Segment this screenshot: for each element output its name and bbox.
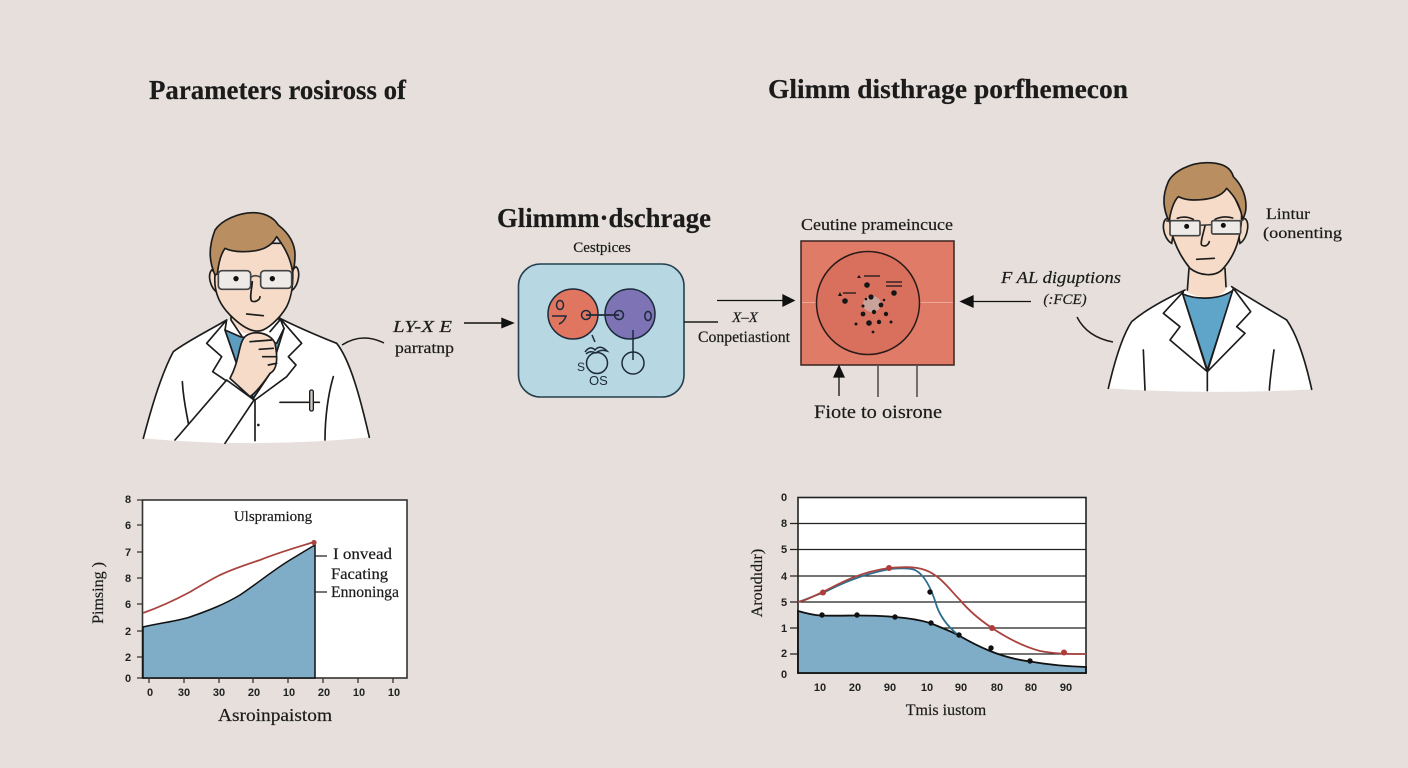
x axis labels: 20 xyxy=(318,687,330,699)
y axis labels: 8 xyxy=(781,518,787,530)
y axis labels xyxy=(125,494,131,685)
y axis labels: 6 xyxy=(125,520,131,532)
x axis labels: 80 xyxy=(991,682,1003,694)
blue line series xyxy=(798,568,958,635)
illustration: scientist thinking xyxy=(143,213,369,443)
text: red panel caption: Ceutine prameincuce xyxy=(801,215,953,234)
text: right scientist label: Lintur xyxy=(1266,206,1311,223)
y axis labels: 6 xyxy=(125,599,131,611)
y axis labels: 1 xyxy=(781,623,787,635)
area series xyxy=(143,545,315,678)
text: left scientist label xyxy=(392,317,454,357)
y axis labels: 5 xyxy=(781,544,787,556)
arrow: label to blue diagram xyxy=(464,318,513,328)
text: competition label: X–X xyxy=(731,310,759,326)
data points red xyxy=(820,565,1067,656)
chart title: Ulspramiong xyxy=(234,509,313,525)
area series xyxy=(798,611,1086,673)
connector: blue box leader xyxy=(684,321,718,323)
y axis labels: 0 xyxy=(781,669,787,681)
chart: right line chart xyxy=(749,492,1086,719)
particles xyxy=(838,275,902,333)
x axis labels: 20 xyxy=(248,687,260,699)
title: right heading: Glimm disthrage porfhemecon xyxy=(768,74,1128,104)
y axis labels: 8 xyxy=(125,494,131,506)
connector between circles xyxy=(552,300,651,360)
text: right callout: (:FCE) xyxy=(1043,292,1087,308)
x axis labels: 30 xyxy=(213,687,225,699)
axis titles: Tmis iustom xyxy=(906,702,987,719)
text: competition label: Conpetiastiont xyxy=(698,329,791,346)
y axis labels: 0 xyxy=(125,673,131,685)
x axis labels: 90 xyxy=(884,682,896,694)
y axis labels: 0 xyxy=(781,492,787,504)
text: red panel footer: Fiote to oisrone xyxy=(814,402,942,423)
x axis labels: 90 xyxy=(1060,682,1072,694)
text: right scientist label: (oonenting xyxy=(1263,225,1342,242)
y axis labels: 8 xyxy=(125,573,131,585)
text: diagram subtitle: Cestpices xyxy=(573,240,631,256)
y axis labels: 4 xyxy=(781,571,788,583)
icon: small circles xyxy=(586,352,644,374)
arrow: right label to red panel xyxy=(961,296,1031,307)
text: right callout: F AL diguptions xyxy=(1000,268,1121,287)
series labels xyxy=(315,546,399,601)
x axis labels: 20 xyxy=(849,682,861,694)
y axis labels: 5 xyxy=(781,597,787,609)
text: competition label xyxy=(698,310,791,346)
text: right scientist label xyxy=(1263,206,1342,242)
line series xyxy=(143,542,314,613)
x axis labels: 10 xyxy=(921,682,933,694)
x axis labels: 80 xyxy=(1025,682,1037,694)
illustration: scientist facing front xyxy=(1108,163,1312,392)
arrow: up into red panel xyxy=(834,366,844,396)
icon: red circle xyxy=(548,289,598,339)
y axis labels: 2 xyxy=(781,648,787,660)
x axis labels: 10 xyxy=(388,687,400,699)
chart: left area chart xyxy=(90,494,407,725)
callout: right scientist leader line xyxy=(1077,317,1113,342)
y axis labels: 7 xyxy=(125,547,131,559)
x axis labels: 10 xyxy=(353,687,365,699)
x axis labels xyxy=(814,682,1072,694)
series labels: Facating xyxy=(331,566,388,583)
y axis labels xyxy=(781,492,788,681)
red line series xyxy=(798,567,1086,654)
heading: centre diagram: Glimmm·dschrage xyxy=(497,203,711,233)
x axis labels: 30 xyxy=(178,687,190,699)
x axis labels xyxy=(147,687,400,699)
y axis labels: 2 xyxy=(125,652,131,664)
panel: red chamber xyxy=(801,241,954,365)
lines: below red panel xyxy=(878,366,917,397)
chart: right line chart: Aroudıdır) xyxy=(749,549,766,617)
axis titles: Asroinpaistom xyxy=(218,705,332,725)
text: diagram letters: OS xyxy=(589,373,608,388)
x axis labels: 10 xyxy=(814,682,826,694)
icon: purple circle xyxy=(605,289,655,339)
text: left scientist label: LY-X E xyxy=(392,317,453,336)
title: left heading: Parameters rosiross of xyxy=(149,75,407,105)
text: right callout xyxy=(1000,268,1121,308)
text: left scientist label: parratnp xyxy=(395,340,454,357)
x axis labels: 10 xyxy=(283,687,295,699)
grid lines xyxy=(790,524,1086,654)
chart: left area chart: Pimsing ) xyxy=(90,562,107,624)
series labels: Ennoninga xyxy=(331,584,399,601)
x axis labels: 90 xyxy=(955,682,967,694)
text: diagram letters xyxy=(577,360,608,388)
plot area xyxy=(798,498,1086,673)
series labels: I onvead xyxy=(333,546,392,563)
x axis labels: 0 xyxy=(147,687,153,699)
panel: blue discharge diagram xyxy=(518,264,684,397)
text: diagram letters: S xyxy=(577,360,585,374)
y axis labels: 2 xyxy=(125,626,131,638)
callout: left scientist leader line xyxy=(342,338,384,345)
plot area xyxy=(142,500,407,678)
axis ticks xyxy=(137,500,393,683)
arrow: blue diagram to red panel xyxy=(717,295,794,306)
data points black xyxy=(819,589,1033,664)
